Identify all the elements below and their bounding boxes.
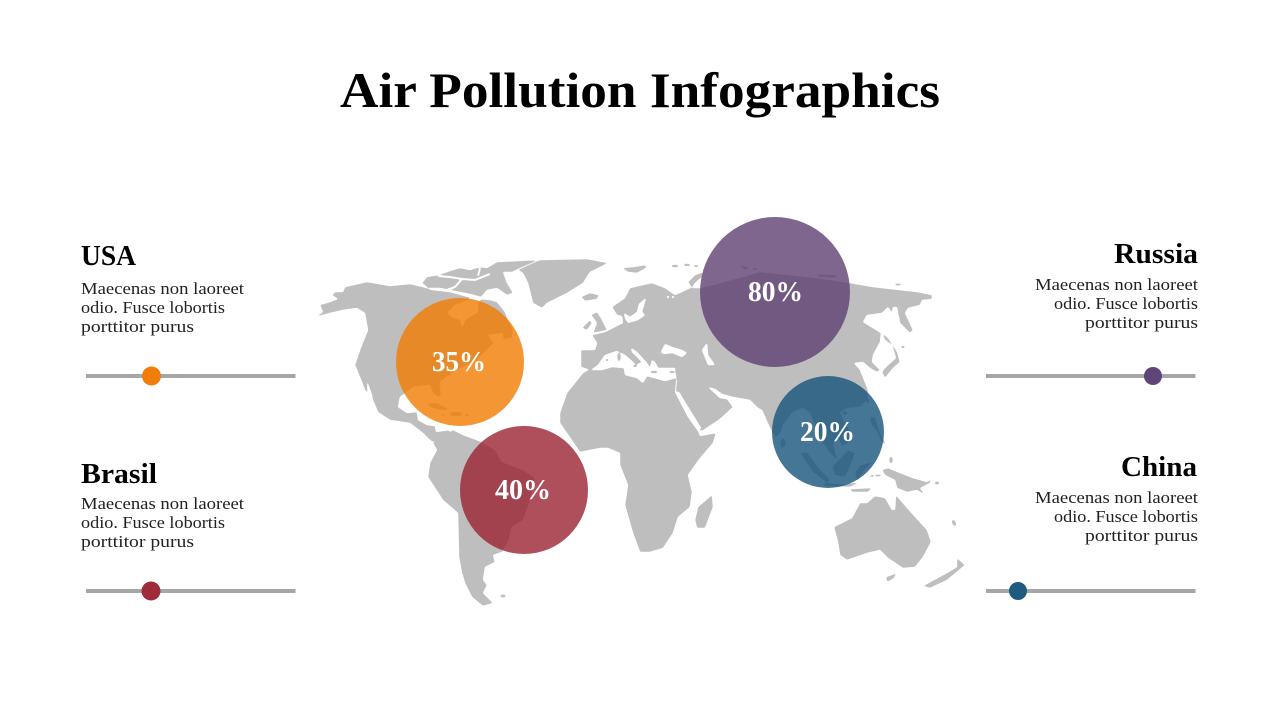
panel: brasil [81, 459, 296, 600]
iceland [581, 293, 599, 301]
china bubble 20%: 20% [800, 417, 855, 448]
panel: russia [986, 239, 1198, 385]
mediterranean islands [617, 352, 621, 362]
hainan [842, 411, 848, 415]
kuril islet [901, 346, 905, 348]
usa heading: USA [81, 241, 137, 272]
usa bubble 35%: 35% [432, 347, 486, 378]
brasil body text: porttitor purus [81, 532, 194, 551]
russia bubble 80%: 80% [748, 277, 803, 308]
arctic islands [422, 260, 538, 297]
title: Air Pollution Infographics [340, 62, 940, 118]
usa body text [81, 279, 244, 336]
russia body text: porttitor purus [1085, 313, 1198, 332]
arctic russian islands [688, 272, 703, 288]
caribbean islands [427, 403, 450, 410]
russia slider [986, 367, 1196, 385]
china heading: China [1121, 452, 1197, 483]
philippines [870, 417, 887, 446]
panel: usa [81, 241, 296, 386]
panel: china [986, 452, 1198, 600]
great britain [591, 312, 607, 333]
java and lesser sunda [823, 482, 860, 487]
russia body text [1035, 275, 1198, 332]
brasil slider [86, 582, 296, 600]
taiwan [866, 398, 870, 404]
usa slider [86, 366, 296, 386]
australia [834, 495, 931, 568]
russia body text: odio. Fusce lobortis [1054, 294, 1198, 313]
china slider [986, 582, 1196, 600]
eurasia [581, 272, 932, 461]
usa body text: odio. Fusce lobortis [81, 298, 225, 317]
russia heading: Russia [1114, 239, 1198, 270]
greenland [518, 259, 608, 308]
brasil heading: Brasil [81, 459, 157, 490]
russia body text: Maecenas non laoreet [1035, 275, 1198, 294]
china body text [1035, 488, 1198, 545]
russia bubble 80% [700, 217, 850, 367]
new zealand [923, 558, 965, 588]
usa body text: porttitor purus [81, 317, 194, 336]
new guinea [882, 468, 931, 495]
south america [428, 430, 535, 606]
usa bubble 35% [396, 298, 524, 426]
madagascar [695, 495, 713, 528]
sumatra [800, 452, 830, 483]
brasil bubble 40% [460, 426, 588, 554]
borneo [832, 450, 855, 477]
china bubble 20% [772, 376, 884, 488]
brasil body text: odio. Fusce lobortis [81, 513, 225, 532]
world map [305, 250, 975, 615]
falkland islands [500, 594, 506, 598]
brasil bubble 40%: 40% [495, 475, 551, 506]
brasil body text [81, 494, 244, 551]
sri lanka [780, 438, 786, 448]
svalbard [622, 265, 646, 273]
seas [367, 268, 715, 431]
ireland [582, 320, 592, 330]
tasmania [886, 573, 897, 582]
brasil body text: Maecenas non laoreet [81, 494, 244, 513]
sulawesi [855, 462, 873, 482]
china body text: odio. Fusce lobortis [1054, 507, 1198, 526]
china body text: Maecenas non laoreet [1035, 488, 1198, 507]
china body text: porttitor purus [1085, 526, 1198, 545]
north america [315, 282, 513, 442]
japan and sakhalin [882, 333, 900, 378]
pacific small islands [889, 456, 893, 464]
usa body text: Maecenas non laoreet [81, 279, 244, 298]
africa [560, 368, 716, 552]
